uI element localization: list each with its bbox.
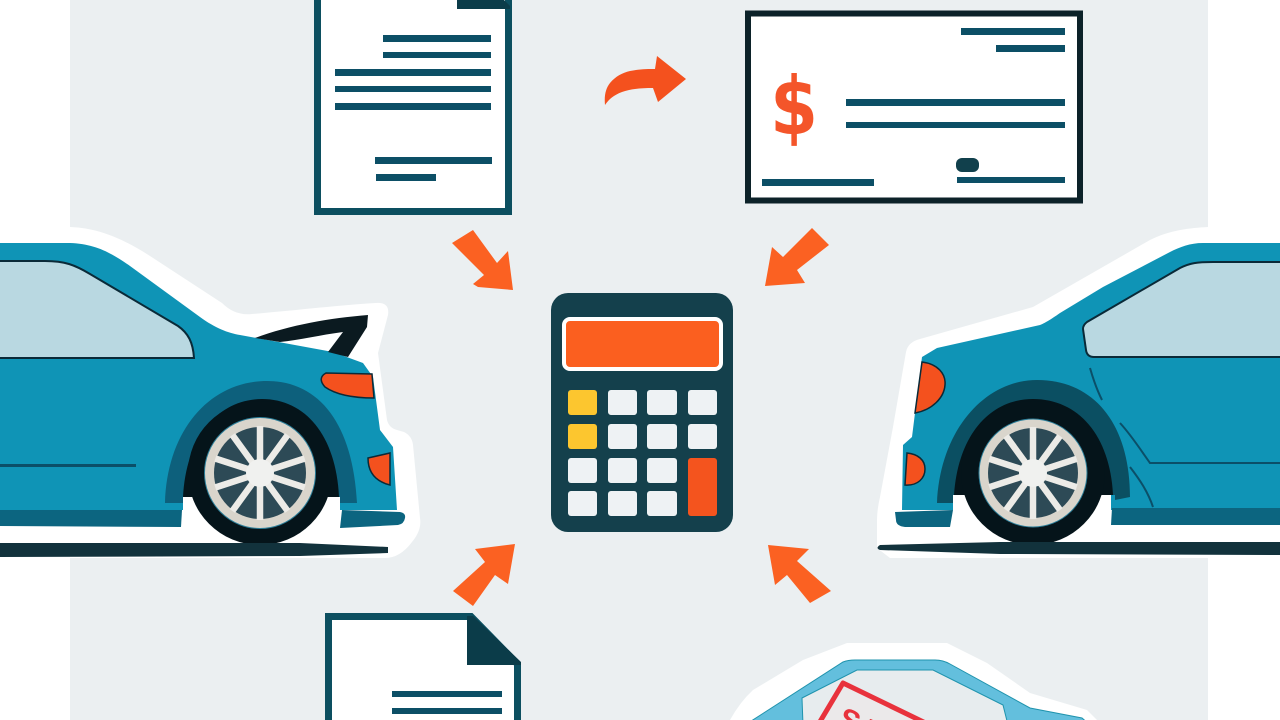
tail light: left car	[321, 373, 374, 398]
wheel: left car	[188, 401, 332, 545]
arrow: bottom document to calculator	[453, 544, 515, 606]
text lines: bottom document	[392, 691, 502, 714]
calculator keys	[568, 390, 717, 516]
left car	[0, 227, 420, 558]
arrow: bottom car to calculator	[768, 545, 831, 603]
white wheel gap: right car	[953, 495, 1111, 528]
calculator body	[551, 293, 733, 532]
spoiler: left car	[255, 315, 368, 357]
folded corner: bottom document	[467, 616, 521, 665]
arrow: curved to cheque	[605, 56, 686, 105]
sill: right car	[1111, 508, 1280, 525]
calculator screen	[564, 319, 721, 369]
car with sale stamp: bottom	[730, 643, 1097, 720]
bumper: left car	[340, 510, 405, 528]
sticker outline: right car	[877, 227, 1280, 558]
page: bottom document	[328, 616, 518, 720]
wheel arch: left car	[165, 381, 357, 503]
door seam: right car	[1090, 368, 1280, 507]
folded corner: top document	[457, 0, 510, 9]
car window: bottom	[802, 670, 1008, 720]
wheel arch: right car	[937, 380, 1130, 503]
sill: left car	[0, 510, 182, 527]
window: left car	[0, 261, 194, 358]
cheque frame	[748, 14, 1080, 200]
page: top document	[318, 0, 508, 212]
car body: left	[0, 243, 397, 510]
tail light: right car	[915, 362, 945, 413]
cheque lines	[762, 28, 1065, 186]
calculator	[551, 293, 733, 532]
document: top left	[318, 0, 510, 212]
wheel: right car	[961, 401, 1105, 545]
text lines: top document	[335, 35, 492, 181]
side line: left car	[0, 464, 136, 467]
signature mark	[956, 158, 979, 172]
window: right car	[1083, 262, 1280, 357]
sale stamp	[815, 683, 940, 720]
cheque: top right	[748, 14, 1080, 200]
bumper: right car	[895, 510, 953, 527]
car body: right	[902, 243, 1280, 510]
car outline: bottom	[745, 660, 1090, 720]
sticker outline: bottom car	[730, 643, 1097, 720]
document: bottom left	[328, 616, 521, 720]
ground shadow: right car	[878, 542, 1280, 555]
arrow: top document to calculator	[452, 230, 513, 290]
lower light: left car	[368, 453, 390, 485]
wheel well: right car	[954, 399, 1113, 495]
white wheel gap: left car	[183, 497, 340, 528]
dollar sign: $	[770, 60, 818, 153]
ground shadow: left car	[0, 543, 388, 557]
lower light: right car	[905, 453, 925, 485]
sticker outline: left car	[0, 227, 420, 558]
arrow: cheque to calculator	[765, 228, 829, 286]
wheel well: left car	[183, 399, 339, 497]
right car	[877, 227, 1280, 558]
